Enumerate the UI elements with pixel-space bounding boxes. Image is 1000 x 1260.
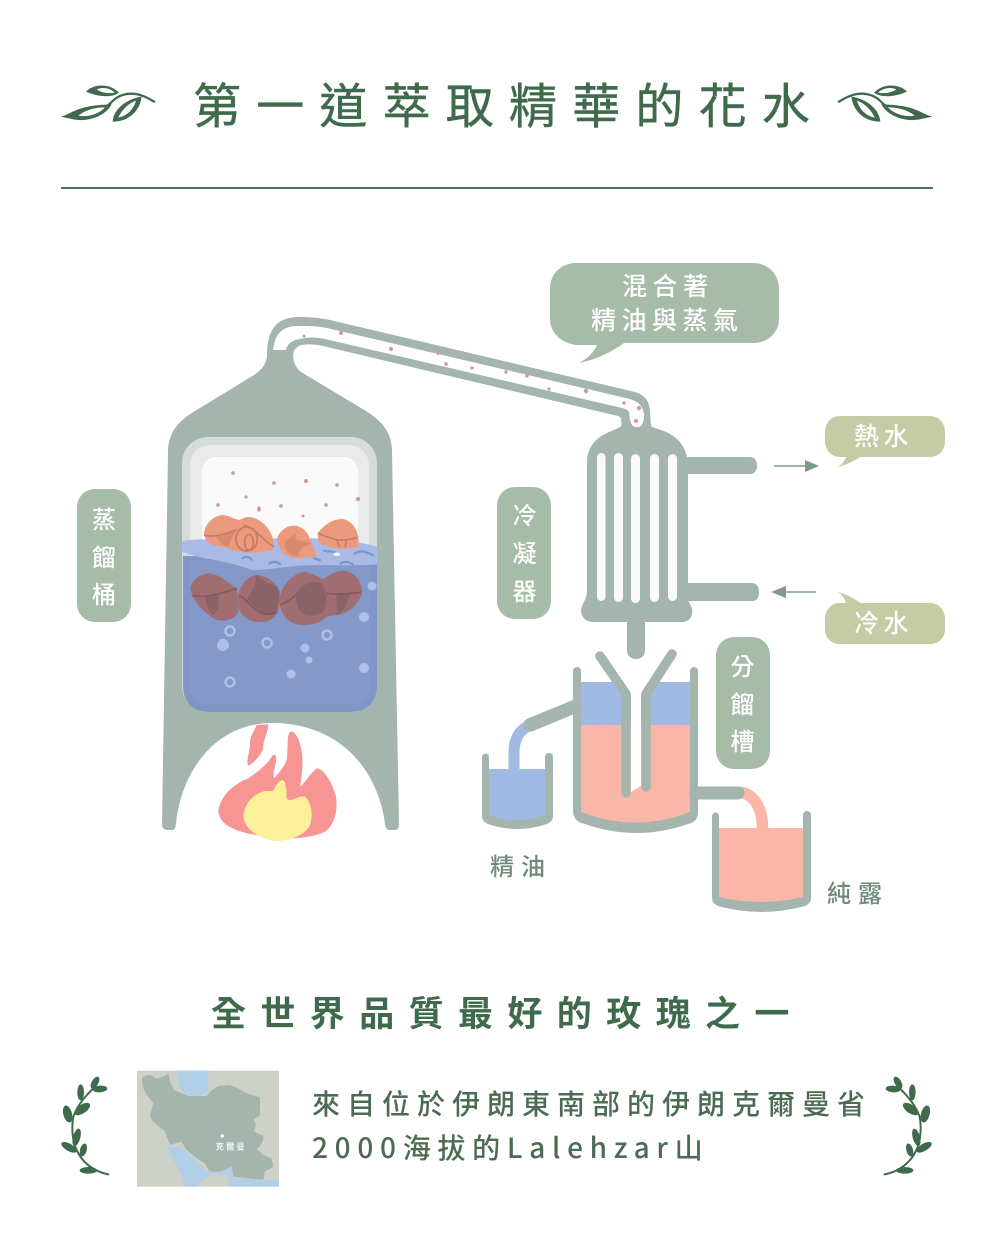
map of Iran: 克爾曼 [216, 1140, 247, 1152]
flame [218, 724, 337, 838]
title [61, 67, 932, 137]
right outlet pipe [696, 786, 738, 800]
label: still: 桶 [92, 575, 116, 610]
callout: cold water [825, 592, 945, 644]
label: condenser: 凝 [512, 534, 536, 569]
arrow: hot water out [774, 460, 819, 472]
label: condenser [497, 487, 551, 619]
funnel [621, 680, 651, 792]
map of Iran [137, 1071, 279, 1187]
heading: world quality: 全世界品質最好的玫瑰之一 [211, 986, 804, 1037]
tank walls [573, 667, 698, 833]
pipe [267, 317, 651, 428]
vessel body [162, 350, 399, 830]
title text: 第一道萃取精華的花水 [193, 67, 825, 137]
hydrosol beaker [712, 811, 811, 912]
label: condenser: 冷 [512, 496, 536, 531]
roses, foam and bubbles [182, 515, 377, 625]
label: separator: 槽 [730, 722, 754, 757]
callout: hot water: 熱水 [854, 417, 913, 453]
label: still: 蒸 [92, 500, 116, 535]
description text [312, 1083, 872, 1167]
oil beaker [482, 753, 553, 829]
submerged roses [191, 571, 362, 625]
condenser body [581, 424, 759, 659]
callout: hot water [825, 416, 945, 467]
label: separator: 分 [730, 647, 754, 682]
label: still [77, 489, 131, 622]
left outlet pipe [530, 706, 576, 725]
description text: 2000海拔的Lalehzar山 [312, 1127, 709, 1167]
callout: steam mix: 精油與蒸氣 [591, 301, 744, 337]
icon: left leaf sprig [61, 86, 154, 122]
vessel chamber [182, 437, 377, 712]
label: hydrosol: 純露 [827, 874, 889, 909]
callout: cold water: 冷水 [854, 604, 913, 640]
flame core [243, 780, 312, 841]
label: separator [716, 637, 770, 769]
condenser [581, 424, 819, 659]
floating roses [204, 515, 359, 558]
hydrosol stream [740, 792, 762, 829]
description text: 來自位於伊朗東南部的伊朗克爾曼省 [312, 1083, 872, 1123]
oil stream [514, 726, 528, 770]
steam dots in chamber [216, 471, 360, 518]
tank liquids [580, 682, 691, 726]
label: separator: 餾 [730, 685, 754, 720]
foam [182, 538, 377, 570]
still: distillation vessel and pipe [162, 317, 651, 830]
label: essential oil: 精油 [490, 847, 552, 882]
callout: steam mix: 混合著 [622, 267, 714, 303]
label: still: 餾 [92, 538, 116, 573]
separator tank [514, 654, 762, 833]
icon: right branch [885, 1075, 933, 1174]
fire [218, 724, 337, 841]
steam dots in pipe [302, 331, 641, 423]
arrow: cold water in [771, 586, 816, 598]
bubbles [217, 582, 376, 678]
condenser tubes [597, 453, 677, 603]
label: condenser: 器 [512, 572, 536, 607]
foam dashes [242, 551, 373, 564]
callout: steam mix [550, 263, 779, 363]
icon: left branch [60, 1075, 108, 1174]
icon: right leaf sprig [839, 86, 932, 122]
water [183, 556, 377, 712]
